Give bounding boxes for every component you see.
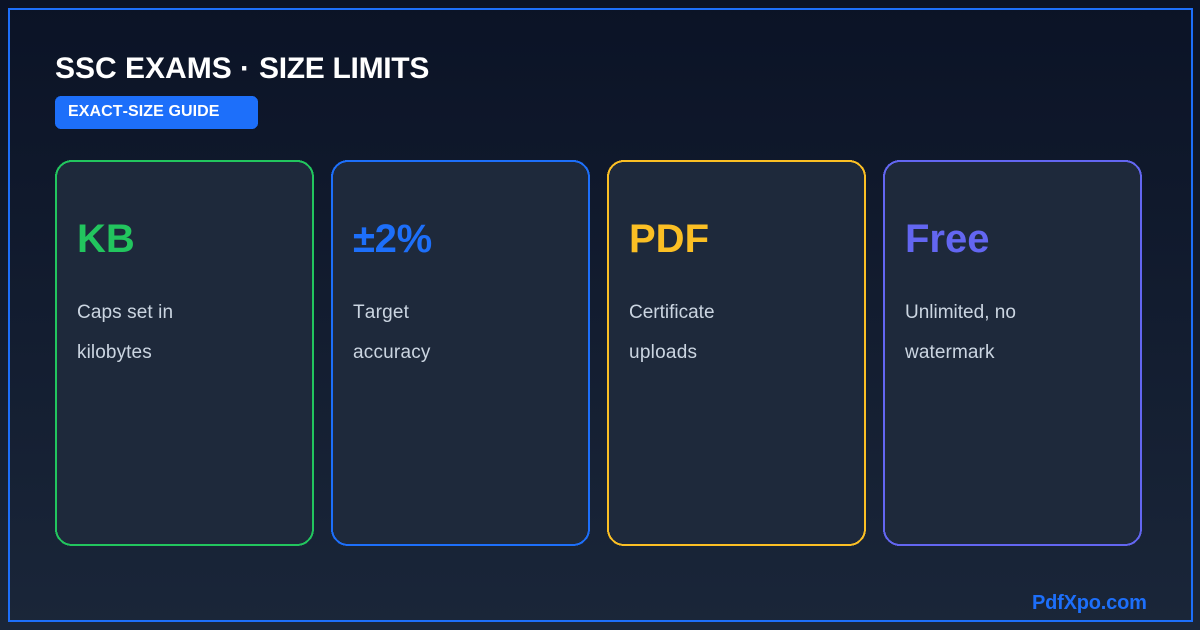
value: PDF: PDF [629,217,709,261]
description: KB: Caps set in [77,302,173,323]
value: ±2%: ±2% [353,217,432,261]
badge: exact-size guide: EXACT-SIZE GUIDE [68,103,220,120]
description: Free: Unlimited, no [905,302,1016,323]
value: Free: Free [905,217,990,261]
description: PDF: uploads [629,342,697,363]
badge: exact-size guide [55,96,258,129]
description: accuracy: Target [353,302,409,323]
description: PDF: Certificate [629,302,715,323]
panel: accuracy [332,161,589,545]
description: Free: watermark [904,342,995,363]
panel: PDF [608,161,865,545]
panel: Free [884,161,1141,545]
description: KB: kilobytes [77,342,152,363]
panel: KB [56,161,313,545]
value: KB: KB [77,217,135,261]
title: SSC EXAMS · [55,52,250,85]
description: accuracy: accuracy [353,342,431,363]
brand: PdfXpo.com: PdfXpo.com [1032,592,1147,614]
title: SIZE LIMITS [259,52,429,85]
